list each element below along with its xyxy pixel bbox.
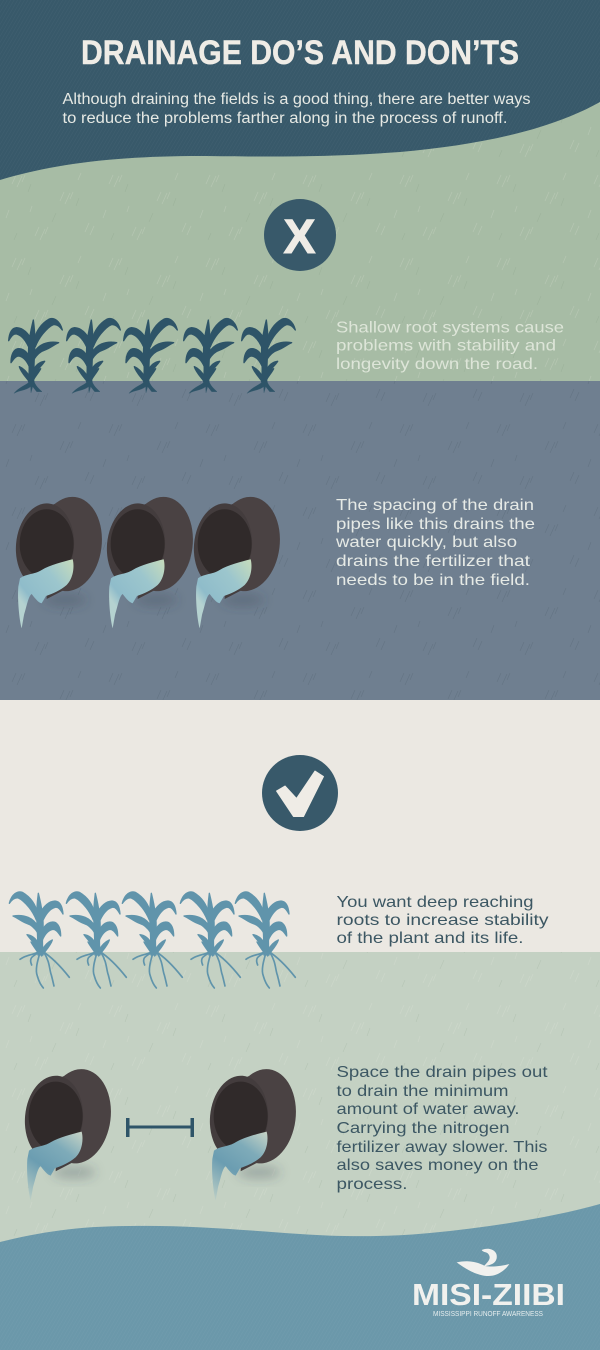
text: deep roots [336,894,548,947]
icon: X in circle [264,199,336,271]
text: shallow roots: problems with stability and [336,338,556,354]
background band: pale green soil [0,952,600,1250]
intro text: Although draining the fields is a good thing, there are better ways [62,91,531,108]
text: pipe spacing problem: pipes like this drains the [336,516,535,533]
text: pipe spacing solution: also saves money on the [336,1157,539,1174]
logo tagline: MISSISSIPPI RUNOFF AWARENESS [433,1309,543,1318]
text: pipe spacing solution: fertilizer away slower. This [336,1139,548,1156]
widely spaced drain pipes [21,1065,301,1201]
icon: X in circle: X [284,211,316,264]
header wave panel [0,0,600,180]
text: pipe spacing solution: to drain the minimum [336,1083,508,1100]
text: pipe spacing problem: water quickly, but also [335,534,517,551]
background band: slate soil [0,381,600,700]
text: deep roots: roots to increase stability [336,912,548,929]
text: pipe spacing problem: needs to be in the field. [336,572,530,589]
logo: Misi-Ziibi [412,1249,565,1318]
text: shallow roots: Shallow root systems cause [336,320,564,336]
shallow-rooted corn plants [9,319,295,393]
text: pipe spacing solution: Space the drain pipes out [336,1064,548,1081]
text: shallow roots [336,320,564,373]
text: pipe spacing solution: amount of water away. [336,1101,520,1118]
text: pipe spacing solution [336,1064,548,1193]
background band: green field [0,100,600,381]
text: pipe spacing problem: drains the fertilizer that [336,553,531,570]
text: deep roots: You want deep reaching [336,894,534,911]
text: pipe spacing problem [335,497,535,589]
intro text: to reduce the problems farther along in the process of runoff. [62,110,508,127]
text: deep roots: of the plant and its life. [336,930,524,947]
text: pipe spacing problem: The spacing of the drain [336,497,534,514]
closely spaced drain pipes [12,493,285,628]
footer wave panel [0,1204,600,1350]
text: shallow roots: longevity down the road. [336,356,538,373]
intro text [62,91,531,127]
background band: off-white field [0,700,600,952]
deep-rooted corn plants [9,892,295,988]
spacing indicator bar [126,1118,194,1137]
title: DRAINAGE DO’S AND DON’TS [81,34,519,72]
logo wordmark: MISI-ZIIBI [412,1277,565,1312]
icon: logo water bird [457,1249,509,1276]
text: pipe spacing solution: process. [336,1176,408,1193]
icon: check mark in circle [262,755,338,831]
text: pipe spacing solution: Carrying the nitrogen [336,1120,510,1137]
